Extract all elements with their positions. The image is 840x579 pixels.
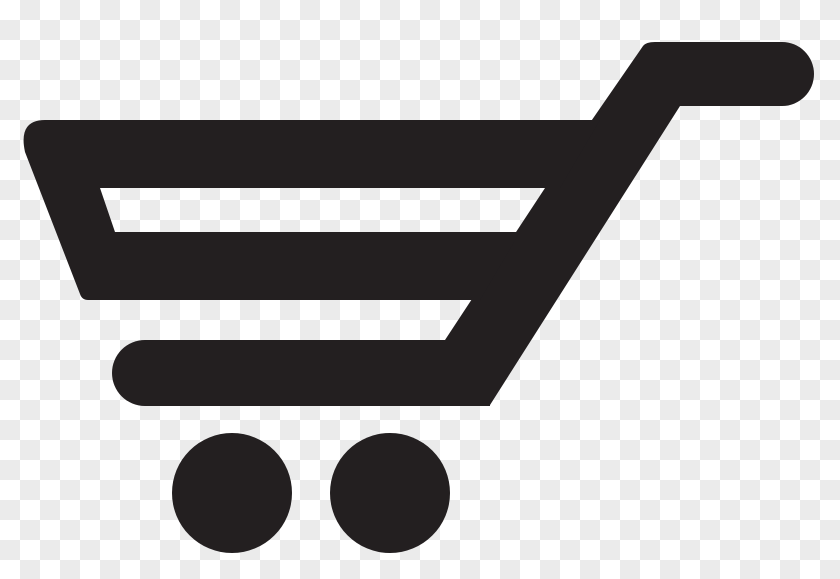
cart handle and frame diagonal — [440, 42, 814, 405]
wheel right — [330, 433, 450, 553]
cart bottom bar — [112, 340, 490, 406]
wheel left — [172, 433, 292, 553]
cart basket — [24, 120, 600, 300]
